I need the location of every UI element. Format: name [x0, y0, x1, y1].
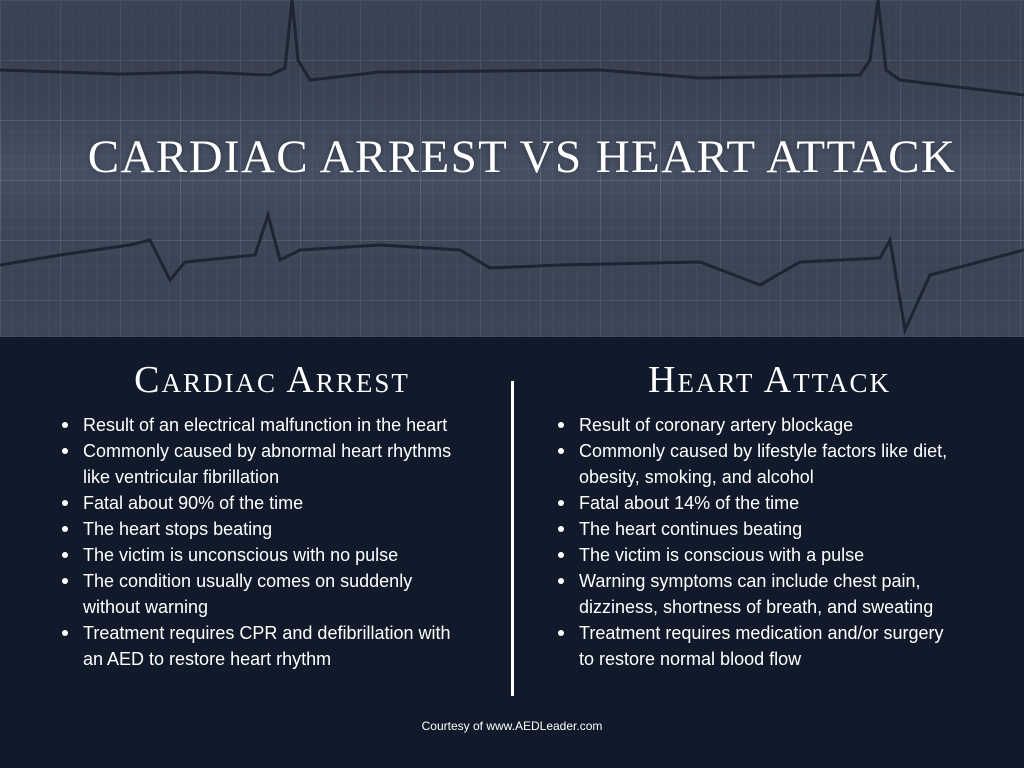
- list: heart attack facts: The heart continues beating: [579, 519, 802, 539]
- list: heart attack facts: Treatment requires medication and/or surgery to restore normal blood flow: [579, 623, 944, 669]
- list: heart attack facts: Commonly caused by lifestyle factors like diet, obesity, smoking, and alcohol: [579, 441, 947, 487]
- list: heart attack facts: [558, 415, 947, 669]
- list: cardiac arrest facts: The heart stops beating: [83, 519, 272, 539]
- title: CARDIAC ARREST VS HEART ATTACK: [88, 131, 956, 183]
- divider: [511, 381, 514, 696]
- footer credit: Courtesy of www.AEDLeader.com: [422, 719, 602, 733]
- list: heart attack facts: Result of coronary artery blockage: [579, 415, 853, 435]
- list: cardiac arrest facts: [62, 415, 451, 669]
- list: cardiac arrest facts: Result of an electrical malfunction in the heart: [83, 415, 447, 435]
- list: cardiac arrest facts: The condition usually comes on suddenly without warning: [83, 571, 412, 617]
- list: heart attack facts: Fatal about 14% of the time: [579, 493, 799, 513]
- list: heart attack facts: The victim is conscious with a pulse: [579, 545, 864, 565]
- list: cardiac arrest facts: Fatal about 90% of the time: [83, 493, 303, 513]
- heading: cardiac arrest: Cardiac Arrest: [134, 359, 410, 401]
- list: cardiac arrest facts: The victim is unconscious with no pulse: [83, 545, 398, 565]
- list: heart attack facts: Warning symptoms can include chest pain, dizziness, shortness of breath, and sweating: [579, 571, 933, 617]
- panel: heart attack: [558, 359, 947, 669]
- heading: heart attack: Heart Attack: [648, 359, 891, 401]
- panel: cardiac arrest: [62, 359, 451, 669]
- header background: ECG grid: [0, 0, 1024, 337]
- list: cardiac arrest facts: Commonly caused by abnormal heart rhythms like ventricular fibrillation: [83, 441, 451, 487]
- list: cardiac arrest facts: Treatment requires CPR and defibrillation with an AED to restore heart rhythm: [83, 623, 450, 669]
